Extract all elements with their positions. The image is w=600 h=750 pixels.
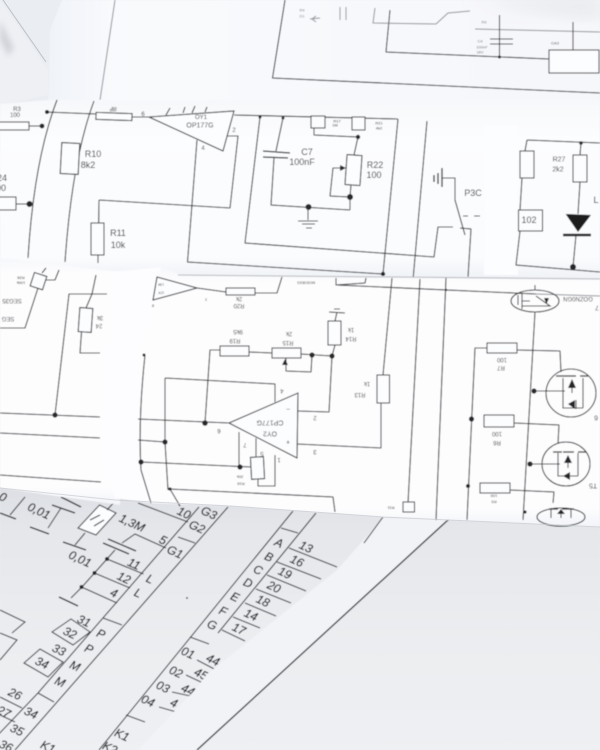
- resistors R17, R21, R22: R22: [367, 160, 383, 170]
- right rail with pin table: [99, 511, 337, 750]
- right rail with pin table: 18: [254, 592, 272, 610]
- rolled sheet: top schematic: [48, 0, 600, 120]
- rolled sheet: lower-left schematic: 24: [95, 322, 102, 328]
- background sheet behind the rolls: [0, 0, 600, 110]
- resistor R16 and left wiring: R16: [237, 482, 245, 486]
- resistor R13 and bus lines: [297, 278, 447, 520]
- paper seam strip: [484, 125, 518, 275]
- op amp OY2: 6: [217, 427, 221, 433]
- boxed numbered terminals: [0, 610, 93, 750]
- photo-resistor, capacitors and nodes: 11: [125, 555, 143, 573]
- right rail with pin table: 04: [139, 692, 157, 710]
- top edge of the main roll: [178, 275, 600, 279]
- op amp OY1: 4: [201, 146, 205, 152]
- boxed numbered terminals: 26: [5, 684, 24, 703]
- photo-resistor, capacitors and nodes: 4: [108, 585, 120, 601]
- resistor R13 and bus lines: 1k: [363, 380, 370, 386]
- photo-resistor, capacitors and nodes: 0,01: [66, 548, 94, 570]
- MOSFET symbols: [511, 290, 599, 526]
- op amp OY2: −: [286, 406, 290, 414]
- photo-resistor, capacitors and nodes: [0, 489, 188, 606]
- right rail with pin table: 13: [297, 538, 315, 556]
- right rail with pin table: 14: [242, 606, 260, 624]
- right rail with pin table: K1: [112, 726, 132, 744]
- right rail with pin table: G: [205, 617, 219, 633]
- rolled sheet: top schematic: OA3: [551, 40, 560, 46]
- MOSFET branch resistors R7, R6, R5: R6: [493, 439, 501, 445]
- paper band around the roll: [101, 267, 161, 503]
- rolled sheet: lower-left schematic: 3k: [96, 314, 103, 320]
- LED branch with R27: 102: [521, 215, 537, 225]
- left rail with labels: [0, 503, 228, 750]
- left wires and resistors R3, R24, R10, R11: 8k2: [81, 160, 95, 170]
- left rail with labels: P: [94, 626, 108, 642]
- resistor R13 and bus lines: R13: [354, 391, 366, 397]
- LED branch with R27: L: [593, 195, 599, 205]
- resistors R17, R21, R22: 1M: [332, 122, 338, 128]
- LED branch with R27: [516, 140, 600, 272]
- left rail with labels: L: [144, 571, 156, 587]
- rolled sheet: top schematic: R6: [481, 20, 487, 24]
- resistor R16 and left wiring: [138, 354, 335, 512]
- feedback network R19, R15, R14: R19: [229, 337, 241, 343]
- op amp OY1: OP177G: [186, 122, 214, 130]
- rolled sheet: top schematic: R4: [299, 8, 305, 12]
- MOSFET branch resistors R7, R6, R5: R5: [491, 500, 497, 504]
- MOSFET symbols: T5: [589, 482, 597, 488]
- op amp OY1: OY1: [195, 115, 208, 121]
- rolled sheet: lower-left schematic: [0, 258, 120, 505]
- MOSFET branch resistors R7, R6, R5: [466, 285, 561, 520]
- left rail with labels: P: [82, 641, 96, 657]
- bottom flat sheet with wiring table: [0, 480, 600, 750]
- boxed numbered terminals: 35: [8, 721, 26, 739]
- op amp OY3 and R20: 2k: [235, 295, 242, 301]
- left wires and resistors R3, R24, R10, R11: 100: [10, 113, 21, 119]
- MOSFET symbols: 6: [594, 414, 598, 420]
- feedback network R19, R15, R14: 1k: [347, 326, 354, 332]
- left wires and resistors R3, R24, R10, R11: 560: [110, 108, 117, 112]
- op amp OY3 and R20: 8: [151, 304, 154, 308]
- rolled sheet: top schematic: 16V: [476, 50, 484, 54]
- right rail with pin table: E: [228, 589, 242, 605]
- op amp OY3 and R20: 1: [204, 298, 207, 302]
- right rail with pin table: 01: [179, 644, 197, 662]
- op amp OY1: 2: [232, 128, 236, 134]
- rolled sheet: top schematic: D1: [299, 14, 305, 18]
- op amp OY2: +: [286, 440, 290, 446]
- boxed numbered terminals: 34: [33, 654, 51, 672]
- left wires and resistors R3, R24, R10, R11: R3: [13, 107, 21, 113]
- op amp OY2: 4: [280, 387, 284, 393]
- feedback network R19, R15, R14: [138, 309, 357, 426]
- resistor R13 and bus lines: R11: [387, 506, 395, 510]
- MOSFET branch resistors R7, R6, R5: R7: [497, 364, 505, 370]
- MOSFET branch resistors R7, R6, R5: 100: [496, 356, 507, 362]
- left rail with labels: L: [132, 585, 144, 601]
- LED branch with R27: R27: [553, 156, 566, 164]
- capacitor C7 and ground: C7: [301, 147, 313, 157]
- resistors R17, R21, R22: R17: [333, 118, 341, 124]
- right rail with pin table: A: [272, 535, 286, 551]
- right rail with pin table: D: [241, 575, 255, 591]
- op amp OY2: 7: [243, 441, 247, 447]
- resistors R17, R21, R22: 4k2: [376, 126, 383, 130]
- left wires and resistors R3, R24, R10, R11: 10k: [111, 240, 126, 250]
- op amp OY3 and R20: R20: [233, 302, 245, 308]
- right rail with pin table: B: [262, 549, 276, 565]
- capacitor C7 and ground: 100nF: [289, 157, 315, 167]
- MOSFET branch resistors R7, R6, R5: 100: [490, 494, 497, 498]
- right rail with pin table: C: [251, 562, 265, 578]
- right rail with pin table: 44: [179, 681, 197, 699]
- op amp OY3 and R20: LM: [158, 282, 164, 288]
- feedback network R19, R15, R14: 9k5: [233, 328, 243, 334]
- left rail with labels: M: [53, 674, 67, 690]
- feedback network R19, R15, R14: R15: [282, 339, 294, 345]
- feedback network R19, R15, R14: R14: [345, 335, 357, 341]
- boxed numbered terminals: 31: [75, 612, 93, 630]
- rolled sheet: lower-left schematic: SEG: [1, 315, 14, 321]
- right rail with pin table: 20: [264, 577, 283, 596]
- roll edge shading line: [0, 488, 600, 527]
- left rail with labels: M: [68, 658, 82, 674]
- feedback wires: [188, 115, 453, 280]
- rolled sheet: lower-left schematic: SEG35: [2, 297, 22, 303]
- MOSFET symbols: 7: [595, 304, 599, 310]
- resistor R16 and left wiring: 20k: [237, 474, 243, 480]
- main diagonal line: [197, 519, 449, 750]
- rolled sheet: lower-left schematic: 100k: [17, 280, 25, 286]
- rolled sheet: lower-left schematic: R28: [17, 276, 25, 280]
- right rail with pin table: 02: [167, 663, 185, 681]
- right rail with pin table: 03: [154, 678, 172, 696]
- left wires and resistors R3, R24, R10, R11: R9: [111, 106, 117, 110]
- op amp OY2: OY2: [263, 430, 277, 436]
- op amp OY3 and R20: MOD3021: [296, 280, 315, 286]
- left rail with labels: G2: [187, 517, 208, 537]
- boxed numbered terminals: 32: [61, 624, 79, 642]
- photo-resistor, capacitors and nodes: 12: [115, 569, 133, 587]
- op amp OY3 and R20: OY: [158, 290, 164, 296]
- right rail with pin table: 19: [276, 564, 294, 582]
- left rail with labels: 10: [175, 504, 193, 522]
- left wires and resistors R3, R24, R10, R11: [0, 100, 238, 263]
- resistors R17, R21, R22: R21: [375, 120, 383, 126]
- right rail with pin table: 17: [230, 620, 249, 639]
- rolled sheet: main schematic: [101, 267, 600, 527]
- rolled sheet: middle schematic: [0, 100, 600, 285]
- LED branch with R27: 2k2: [552, 166, 564, 174]
- switch P3C: P3C: [464, 188, 482, 198]
- light paper patch clipping the table: [138, 518, 449, 750]
- right rail with pin table: 45: [192, 665, 210, 683]
- boxed numbered terminals: 33: [50, 641, 68, 659]
- left rail with labels: 5: [157, 532, 169, 548]
- op amp OY2: CP177G: [257, 418, 283, 426]
- MOSFET branch resistors R7, R6, R5: 100: [491, 430, 502, 436]
- boxed numbered terminals: 34: [22, 704, 40, 722]
- resistors R17, R21, R22: 100: [366, 170, 382, 180]
- photo-resistor, capacitors and nodes: 0,01: [25, 500, 53, 522]
- rolled sheet: top schematic: 100nF: [476, 44, 488, 50]
- left rail with labels: G1: [165, 542, 185, 562]
- MOSFET symbols: GOZN0GN: [563, 295, 593, 301]
- op amp OY3 and R20: [151, 277, 600, 308]
- left wires and resistors R3, R24, R10, R11: R11: [110, 228, 126, 238]
- right rail with pin table: 4: [168, 695, 180, 711]
- op amp OY1: [141, 106, 236, 152]
- switch P3C: [434, 168, 482, 277]
- op amp OY2: 3: [313, 448, 317, 454]
- op amp OY2: 1: [277, 456, 281, 462]
- right rail with pin table: 16: [288, 552, 306, 570]
- capacitor C7 and ground: [263, 118, 350, 228]
- op amp OY1: 6: [141, 112, 145, 118]
- right rail with pin table: 44: [204, 651, 222, 669]
- op amp OY2: 2: [313, 414, 317, 420]
- resistors R17, R21, R22: [311, 116, 383, 210]
- right rail with pin table: F: [217, 603, 230, 619]
- op amp OY2: 5: [260, 450, 264, 456]
- feedback network R19, R15, R14: 2k: [285, 330, 292, 336]
- left rail with labels: G3: [199, 503, 220, 523]
- photo-resistor, capacitors and nodes: 1,3M: [117, 511, 147, 535]
- left wires and resistors R3, R24, R10, R11: R10: [85, 149, 101, 159]
- rolled sheet: top schematic: C4: [477, 38, 483, 44]
- short line on the paper patch: [364, 517, 383, 543]
- op amp OY2: [217, 387, 317, 462]
